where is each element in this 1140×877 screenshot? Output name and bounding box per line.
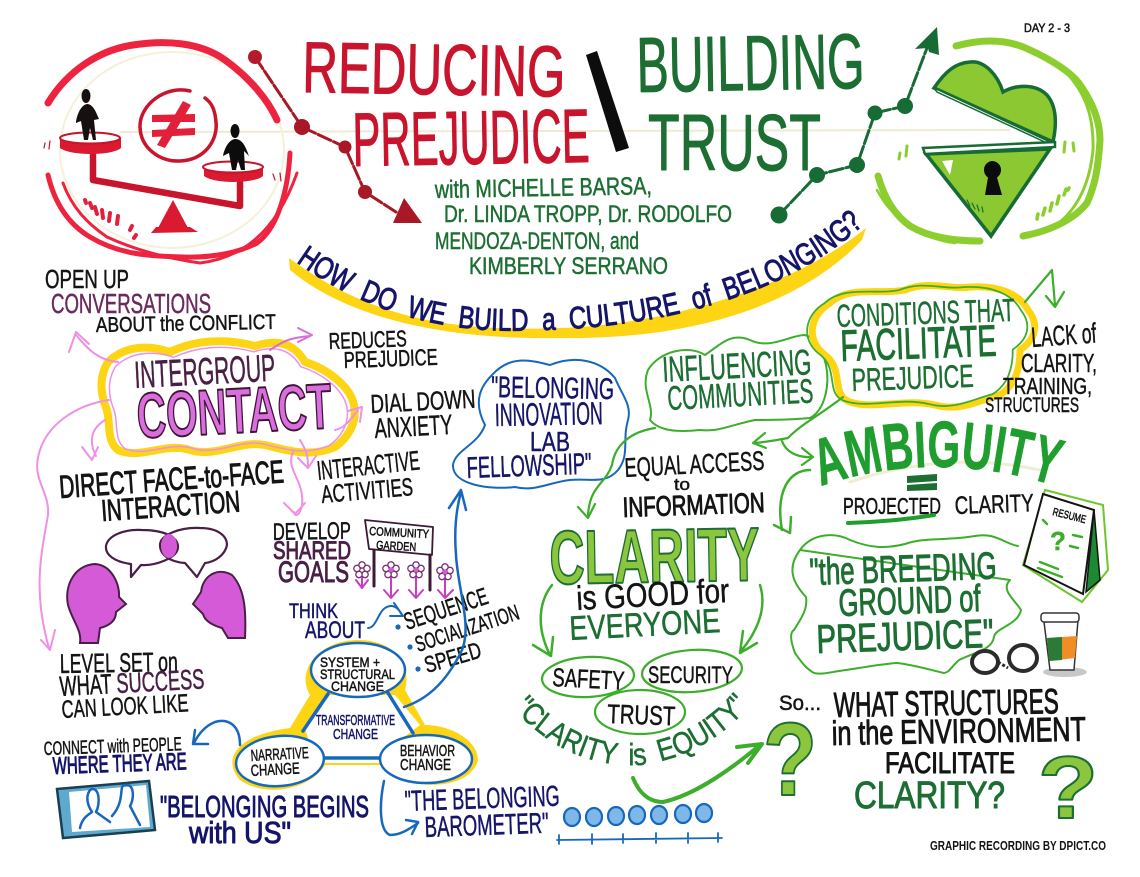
arrow: green rising dotted line [770, 27, 939, 224]
icon: community garden sign [354, 520, 453, 598]
text: connect with people: CONNECT with PEOPLE [43, 734, 182, 760]
text: interactive activities: ACTIVITIES [320, 473, 414, 509]
icon: tablet video call [57, 781, 155, 838]
panel: intergroup contact [102, 341, 355, 453]
speakers: with MICHELLE BARSA, [434, 172, 652, 204]
speakers [434, 172, 732, 280]
node: system and structural change: CHANGE [331, 678, 384, 694]
list: sequence socialization speed: SPEED [421, 637, 484, 678]
node: system and structural change: STRUCTURAL [320, 667, 395, 682]
node: behavior change: BEHAVIOR [400, 743, 455, 760]
text: dial down anxiety: DIAL DOWN [370, 384, 476, 419]
callout: belonging innovation lab fellowship [453, 360, 629, 488]
icon: unbalanced scale in red circle [44, 43, 297, 263]
text: so what structures: So... [779, 692, 821, 715]
text: reduces prejudice: PREJUDICE [343, 344, 438, 373]
text: develop shared goals: DEVELOP [273, 518, 351, 546]
text: reduces prejudice: REDUCES [328, 325, 407, 354]
text: develop shared goals [273, 518, 351, 589]
text: direct face-to-face interaction: DIRECT FACE-to-FACE [58, 453, 285, 505]
diagram: transformative change triangle [232, 640, 478, 790]
arrows: green connectors [578, 397, 843, 533]
title: Building Trust: TRUST [648, 98, 821, 187]
text: equal access to information: INFORMATION [622, 487, 765, 523]
date label: DAY 2 - 3 [1024, 21, 1070, 35]
heading: clarity is good for everyone [549, 512, 760, 648]
icon: community garden sign: GARDEN [376, 538, 417, 554]
title: Reducing Prejudice: PREJUDICE [352, 94, 590, 183]
callout: belonging innovation lab fellowship: INNOVATION [494, 395, 603, 433]
quote: belonging begins with us: with US" [188, 815, 291, 850]
text: open up conversations [45, 264, 276, 337]
text: lack of clarity, training, structures: LACK of [1030, 318, 1097, 353]
chart: belonging barometer dots and scale [557, 804, 722, 844]
title: Reducing Prejudice: REDUCING [302, 28, 566, 113]
callout: the breeding ground of prejudice: "the BREEDING [809, 545, 997, 594]
person left [76, 89, 99, 140]
callout: the breeding ground of prejudice: GROUND of [838, 578, 982, 625]
quote: the belonging barometer [404, 781, 560, 844]
equals projected clarity: CLARITY [954, 489, 1034, 520]
text: so what structures: FACILITATE [885, 747, 1015, 780]
quote: clarity is equity: "CLARITY is EQUITY" [523, 692, 738, 766]
speakers: MENDOZA-DENTON, and [435, 228, 639, 255]
arrow: think about to list [368, 603, 403, 628]
text: equal access to information: EQUAL ACCESS [624, 446, 765, 483]
text: connect with people: WHERE THEY ARE [52, 748, 187, 780]
text: develop shared goals: GOALS [278, 556, 349, 589]
right pan [204, 167, 263, 182]
text: reduces prejudice [328, 325, 438, 373]
center label: TRANSFORMATIVE [316, 712, 395, 729]
text: so what structures: CLARITY? [854, 775, 1005, 817]
quote: belonging begins with us [160, 789, 369, 850]
icon: coffee cup [1041, 613, 1087, 677]
text: think about: THINK [289, 600, 338, 623]
list: sequence socialization speed [395, 583, 522, 678]
panel: conditions that facilitate prejudice: FACILITATE [840, 317, 997, 371]
icon: question mark right: ? [1038, 738, 1098, 837]
title: Building Trust: BUILDING [636, 17, 865, 109]
text: dial down anxiety: ANXIETY [374, 409, 453, 444]
text: interactive activities [315, 445, 421, 509]
text: connect with people [43, 734, 187, 780]
head left [67, 564, 126, 643]
text: think about: ABOUT [305, 617, 365, 644]
person right [223, 124, 249, 170]
text: level set on what success: CAN LOOK LIKE [61, 689, 189, 724]
icon: resume booklet: RESUME [1051, 506, 1087, 526]
panel: intergroup contact: INTERGROUP [133, 348, 276, 397]
text: equal access to information: to [674, 475, 690, 494]
not equal circle [140, 90, 216, 161]
text: think about [289, 600, 365, 644]
equals projected clarity [843, 474, 1034, 523]
text: lack of clarity, training, structures [985, 318, 1097, 417]
equals projected clarity: PROJECTED [843, 493, 941, 519]
speakers: KIMBERLY SERRANO [469, 253, 668, 280]
arrows: pink from intergroup contact [37, 328, 362, 650]
text: lack of clarity, training, structures: CLARITY, [1021, 348, 1097, 378]
heading: clarity is good for everyone: EVERYONE [568, 602, 721, 648]
node: system and structural change: SYSTEM + [320, 654, 380, 670]
flowers [354, 562, 453, 598]
text: level set on what success: LEVEL SET on [60, 647, 178, 679]
trio: safety security trust: SECURITY [648, 662, 733, 689]
heading: ambiguity: AMBIGUITY [818, 420, 1066, 486]
heart bottom [926, 149, 1050, 236]
node: system and structural change [311, 643, 405, 697]
node: narrative change [234, 732, 326, 790]
center label [316, 712, 395, 743]
speakers: Dr. LINDA TROPP, Dr. RODOLFO [444, 201, 732, 228]
text: open up conversations: OPEN UP [45, 264, 129, 294]
heart top [934, 62, 1055, 142]
callout: the breeding ground of prejudice [791, 535, 1021, 674]
node: narrative change: CHANGE [250, 760, 300, 780]
arrow: blue to barometer [381, 781, 418, 835]
callout: belonging innovation lab fellowship: LAB [530, 426, 570, 457]
panel: conditions that facilitate prejudice: PREJUDICE [851, 358, 974, 398]
panel: influencing communities: INFLUENCING [661, 341, 812, 390]
heading: clarity is good for everyone: is GOOD for [575, 572, 730, 618]
list: sequence socialization speed: SOCIALIZATION [412, 600, 522, 657]
left pan [60, 138, 121, 154]
divider slash [586, 51, 629, 152]
text: level set on what success: WHAT SUCCESS [59, 663, 205, 702]
icon: resume booklet [1023, 490, 1108, 602]
title: Reducing Prejudice [302, 28, 590, 183]
icon: split heart with keyhole [877, 41, 1100, 243]
beam and base [93, 155, 240, 206]
callout: belonging innovation lab fellowship: FELLOWSHIP" [466, 448, 592, 485]
arrow: equity to question [633, 744, 762, 802]
trio: safety security trust [541, 647, 743, 734]
text: open up conversations: CONVERSATIONS [51, 288, 211, 319]
text: so what structures [779, 682, 1086, 817]
trio: safety security trust: SAFETY [552, 662, 625, 696]
keyhole [984, 161, 1002, 195]
text: lack of clarity, training, structures: TRAINING, [1003, 373, 1092, 399]
text: level set on what success [59, 647, 205, 724]
node: narrative change: NARRATIVE [250, 745, 309, 765]
icon: handcuffs [972, 645, 1037, 673]
panel: conditions that facilitate prejudice [807, 285, 1035, 407]
arrow: green to lack of clarity [1025, 270, 1064, 307]
callout: the breeding ground of prejudice: PREJUDICE" [816, 612, 994, 662]
arrow: red descending dotted line [248, 50, 422, 223]
center label: CHANGE [333, 726, 378, 743]
quote: the belonging barometer: "THE BELONGING [404, 781, 560, 818]
arrows: clarity to safety and security [533, 585, 762, 656]
arrow: blue to connect with people [193, 721, 240, 745]
icon: question mark left: ? [763, 702, 817, 818]
banner: How do we build a culture of belonging: HOW DO WE BUILD a CULTURE of BELONGING? [297, 210, 860, 332]
panel: influencing communities: COMMUNITIES [666, 372, 814, 418]
icon: resume booklet: ? [1050, 526, 1066, 556]
callout: belonging innovation lab fellowship: "BELONGING [491, 371, 614, 406]
quote: belonging begins with us: "BELONGING BEGINS [160, 789, 369, 824]
trio: safety security trust: TRUST [607, 699, 676, 731]
text: equal access to information [622, 446, 765, 523]
node: behavior change: CHANGE [400, 757, 451, 774]
text: open up conversations: ABOUT the CONFLICT [96, 311, 276, 337]
text: develop shared goals: SHARED [273, 537, 351, 565]
list: sequence socialization speed: SEQUENCE [401, 583, 492, 636]
quote: the belonging barometer: BAROMETER" [424, 808, 549, 844]
heading: ambiguity [818, 420, 1066, 486]
title: Building Trust [636, 17, 865, 187]
text: direct face-to-face interaction: INTERACTION [100, 485, 241, 528]
panel: influencing communities [646, 335, 827, 431]
arrow: blue long to fellowship [404, 490, 466, 707]
text: lack of clarity, training, structures: STRUCTURES [985, 394, 1079, 417]
node: behavior change [380, 735, 472, 783]
panel: conditions that facilitate prejudice: CONDITIONS THAT [836, 292, 1015, 334]
text: direct face-to-face interaction [58, 453, 285, 528]
heading: clarity is good for everyone: CLARITY [549, 512, 760, 601]
text: dial down anxiety [370, 384, 476, 444]
icon: community garden sign: COMMUNITY [369, 524, 429, 541]
panel: intergroup contact: CONTACT [135, 370, 333, 452]
head right [193, 572, 245, 638]
icon: overlapping speech bubbles and heads [67, 528, 245, 643]
text: interactive activities: INTERACTIVE [315, 445, 421, 486]
